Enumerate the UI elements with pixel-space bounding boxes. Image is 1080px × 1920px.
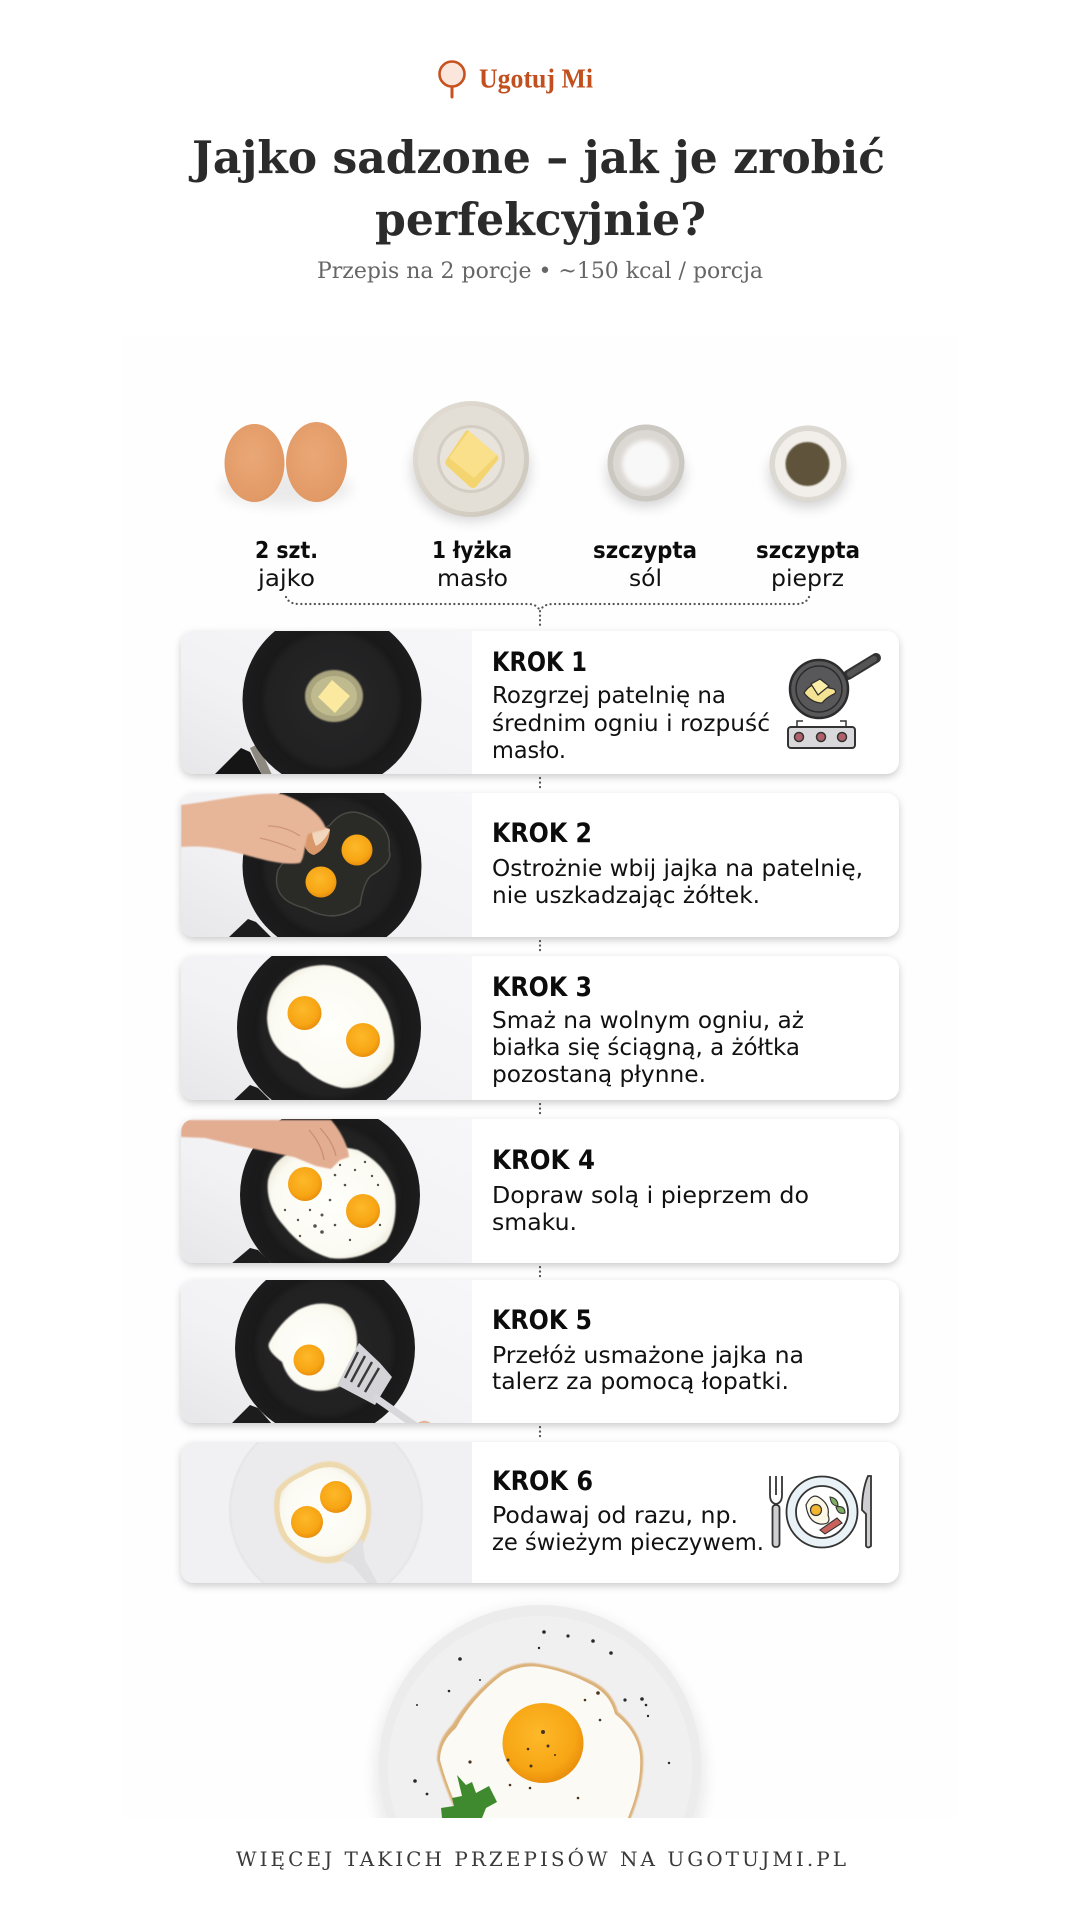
- step 4 text: smaku.: [492, 1210, 577, 1236]
- panel: step 1: [178, 630, 902, 780]
- title: [188, 131, 885, 246]
- step 6 text: Podawaj od razu, np.: [492, 1503, 738, 1529]
- icon: spoon pin: [440, 62, 464, 97]
- photo: pan with butter: [181, 631, 472, 774]
- step 5 text: [492, 1305, 804, 1395]
- step 1 text: średnim ogniu i rozpuść: [492, 711, 770, 737]
- step 2 text: [492, 818, 863, 909]
- title: Jajko sadzone – jak je zrobić: [188, 131, 885, 184]
- icon: salt bowl: [608, 424, 684, 506]
- ingredients row: [220, 401, 860, 592]
- ingredient labels: salt: [593, 538, 697, 592]
- step 4 text: KROK 4: [492, 1145, 595, 1176]
- brand name: Ugotuj Mi: [479, 64, 593, 94]
- step 4 text: Dopraw solą i pieprzem do: [492, 1183, 809, 1209]
- ingredient labels: butter: [432, 538, 512, 592]
- step 1 text: masło.: [492, 738, 566, 764]
- ingredient labels: eggs: 2 szt.: [255, 538, 318, 564]
- photo: seasoning eggs: [181, 1119, 472, 1263]
- step 3 text: KROK 3: [492, 972, 592, 1003]
- icon: pan on stove: [788, 658, 876, 748]
- step 1 text: KROK 1: [492, 647, 587, 678]
- ingredient labels: salt: szczypta: [593, 538, 697, 564]
- ingredient labels: pepper: [756, 538, 860, 592]
- pepper specks: [413, 1630, 670, 1795]
- step 2 text: Ostrożnie wbij jajka na patelnię,: [492, 856, 863, 882]
- step 1 text: Rozgrzej patelnię na: [492, 683, 726, 709]
- step 2 text: KROK 2: [492, 818, 592, 849]
- step 6 text: [492, 1466, 764, 1556]
- step 5 text: talerz za pomocą łopatki.: [492, 1369, 789, 1395]
- dotted connector: ingredients to steps: [286, 597, 809, 1440]
- ingredient labels: pepper: szczypta: [756, 538, 860, 564]
- footer: WIĘCEJ TAKICH PRZEPISÓW NA UGOTUJMI.PL: [236, 1846, 846, 1871]
- step 3 text: [492, 972, 804, 1088]
- icon: pepper bowl: [770, 426, 846, 507]
- title: perfekcyjnie?: [375, 193, 706, 246]
- photo: eggs on plate: [181, 1442, 472, 1583]
- icon: eggs: [220, 422, 352, 506]
- panel: step 6: [178, 1442, 902, 1590]
- step 6 text: ze świeżym pieczywem.: [492, 1530, 764, 1556]
- panel: step 4: [178, 1118, 902, 1270]
- step 4 text: [492, 1145, 809, 1236]
- subtitle: Przepis na 2 porcje • ~150 kcal / porcja: [317, 259, 763, 284]
- step 2 text: nie uszkadzając żółtek.: [492, 883, 760, 909]
- photo: lifting egg with spatula: [181, 1280, 472, 1423]
- ingredient labels: butter: masło: [437, 566, 508, 592]
- panel: step 3: [178, 956, 902, 1106]
- ingredient labels: salt: sól: [629, 566, 662, 592]
- ingredient labels: butter: 1 łyżka: [432, 538, 512, 564]
- ingredient labels: eggs: jajko: [257, 566, 315, 592]
- panel: step 5: [178, 1280, 902, 1430]
- icon: plate with fork and knife: [770, 1476, 871, 1548]
- step 6 text: KROK 6: [492, 1466, 593, 1497]
- step 5 text: KROK 5: [492, 1305, 592, 1336]
- panel: step 2: [178, 792, 902, 944]
- step 3 text: Smaż na wolnym ogniu, aż: [492, 1008, 804, 1034]
- icon: parsley: [441, 1775, 497, 1818]
- ingredient labels: pepper: pieprz: [771, 566, 844, 592]
- icon: butter on plate: [413, 401, 529, 520]
- step 1 text: [492, 647, 770, 764]
- step 3 text: białka się ściągną, a żółtka: [492, 1035, 800, 1061]
- final dish photo: [374, 1605, 706, 1818]
- photo: cracking eggs into pan: [181, 793, 472, 937]
- step 3 text: pozostaną płynne.: [492, 1062, 706, 1088]
- ingredient labels: eggs: [255, 538, 318, 592]
- step 5 text: Przełóż usmażone jajka na: [492, 1343, 804, 1369]
- photo: eggs frying: [181, 956, 472, 1100]
- logo: [440, 62, 593, 97]
